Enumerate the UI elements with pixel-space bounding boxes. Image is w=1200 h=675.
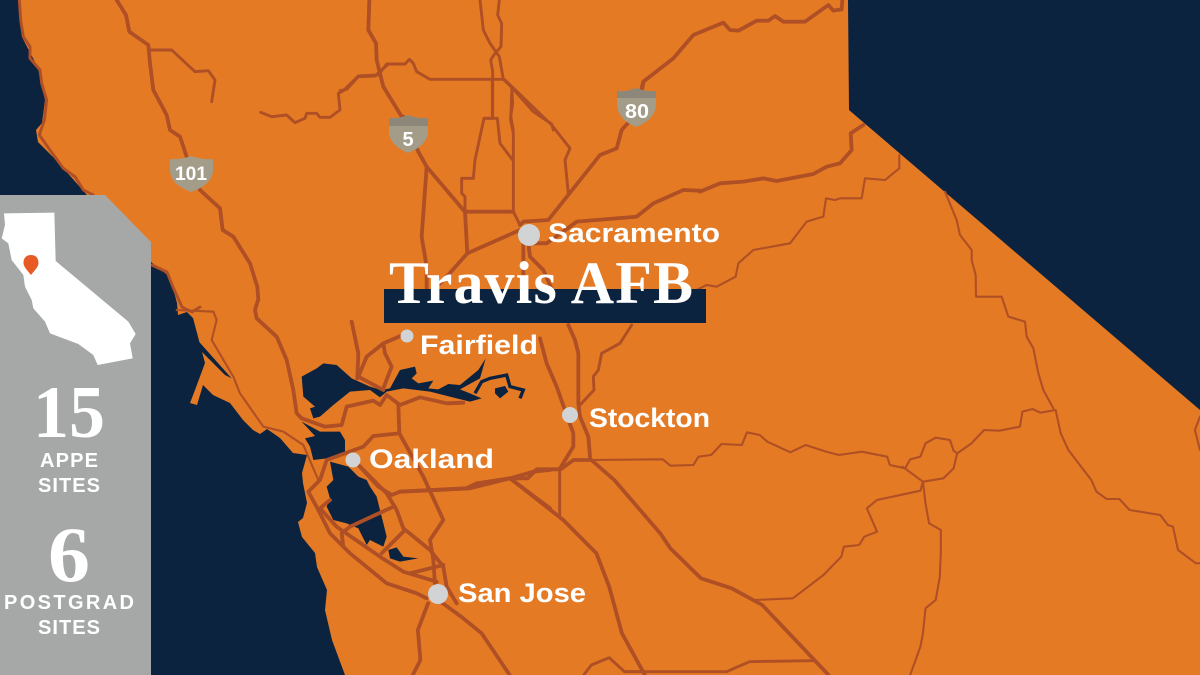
Sacramento area roads — [403, 80, 700, 300]
eastern roads — [697, 125, 1053, 408]
label: APPE sites: SITES — [38, 475, 100, 497]
Central Valley and south roads — [400, 409, 1200, 675]
panel background — [0, 195, 151, 675]
title: Travis AFB — [389, 250, 693, 316]
icon: California outline — [2, 213, 136, 365]
city: Sacramento: Sacramento — [548, 218, 720, 248]
label: postgrad sites: SITES — [38, 617, 100, 639]
shield: Interstate 80: 80 — [625, 101, 649, 123]
city: Stockton: Stockton — [589, 403, 710, 433]
city: San Jose: San Jose — [458, 578, 586, 608]
bay and delta water — [196, 338, 523, 562]
shield: Interstate 5: 5 — [402, 129, 414, 151]
shield: Interstate 101 — [170, 156, 213, 192]
stat: 15: 15 — [33, 372, 105, 454]
stat: 6: 6 — [48, 511, 90, 598]
shield: Interstate 101: 101 — [175, 164, 207, 185]
Stockton area roads — [540, 325, 632, 468]
city: Oakland: Oakland — [369, 444, 494, 474]
Bay Area roads — [177, 300, 550, 603]
shield: Interstate 5 — [389, 115, 428, 153]
label: postgrad sites: POSTGRAD — [4, 592, 134, 614]
title band — [384, 289, 706, 323]
coastal road south — [152, 265, 200, 312]
city: Fairfield: Fairfield — [420, 330, 538, 360]
icon: location pin — [24, 255, 38, 275]
panel: site statistics — [0, 195, 151, 675]
northwest roads — [19, 0, 400, 300]
label: postgrad sites — [4, 592, 134, 639]
northern roads and I-80 — [340, 0, 842, 130]
label: APPE sites — [38, 450, 100, 497]
label: APPE sites: APPE — [40, 450, 98, 472]
shield: Interstate 80 — [617, 88, 656, 127]
